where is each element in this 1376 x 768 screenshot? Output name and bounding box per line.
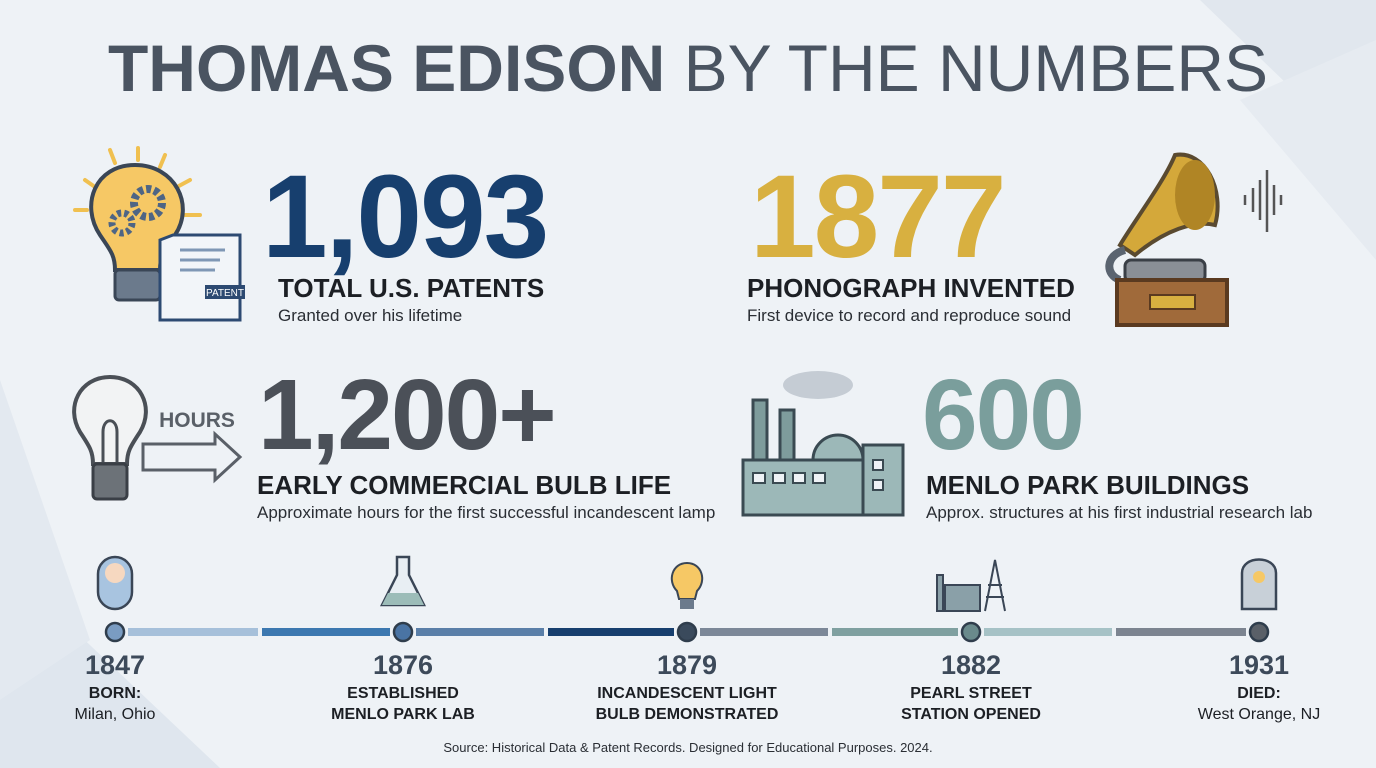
icon: bulb with hours arrow	[72, 375, 242, 500]
icon: phonograph	[1105, 152, 1282, 327]
timeline: ESTABLISHED	[347, 685, 459, 702]
timeline: Milan, Ohio	[75, 706, 155, 723]
text: Approx. structures at his first industrial research lab	[926, 503, 1312, 522]
stat: phonograph: 1877	[750, 151, 1005, 283]
stat: buildings: 600	[922, 359, 1083, 471]
icon: power station	[937, 560, 1005, 611]
text: Approximate hours for the first successful incandescent lamp	[257, 503, 715, 522]
timeline	[75, 556, 1320, 723]
timeline: PEARL STREET	[910, 685, 1032, 702]
timeline: 1882	[941, 650, 1001, 680]
text: Granted over his lifetime	[278, 306, 462, 325]
timeline: BULB DEMONSTRATED	[596, 706, 778, 723]
stat: bulb life: 1,200+	[258, 359, 555, 471]
text: TOTAL U.S. PATENTS	[278, 273, 544, 303]
text: MENLO PARK BUILDINGS	[926, 470, 1249, 500]
title: THOMAS EDISON BY THE NUMBERS	[108, 31, 1268, 105]
timeline: STATION OPENED	[901, 706, 1041, 723]
timeline: 1879	[657, 650, 717, 680]
icon: baby	[98, 557, 132, 609]
icon: bulb with hours arrow: HOURS	[159, 409, 235, 432]
icon: flask	[382, 557, 424, 605]
timeline: West Orange, NJ	[1198, 706, 1320, 723]
timeline: BORN:	[89, 685, 141, 702]
source footer: Source: Historical Data & Patent Records. Designed for Educational Purposes. 2024.	[443, 740, 933, 755]
text: EARLY COMMERCIAL BULB LIFE	[257, 470, 671, 500]
timeline: DIED:	[1237, 685, 1281, 702]
timeline: 1847	[85, 650, 145, 680]
timeline: 1931	[1229, 650, 1289, 680]
timeline: INCANDESCENT LIGHT	[597, 685, 777, 702]
icon: bulb with gears and patent: PATENT	[206, 288, 244, 299]
icon: bulb with gears and patent	[73, 146, 245, 322]
stat: patents: 1,093	[262, 151, 547, 283]
icon: factory	[742, 371, 904, 516]
text: PHONOGRAPH INVENTED	[747, 273, 1075, 303]
timeline: MENLO PARK LAB	[331, 706, 475, 723]
timeline: 1876	[373, 650, 433, 680]
text: First device to record and reproduce sound	[747, 306, 1071, 325]
icon: bulb small	[672, 563, 702, 609]
icon: tombstone	[1242, 560, 1276, 609]
